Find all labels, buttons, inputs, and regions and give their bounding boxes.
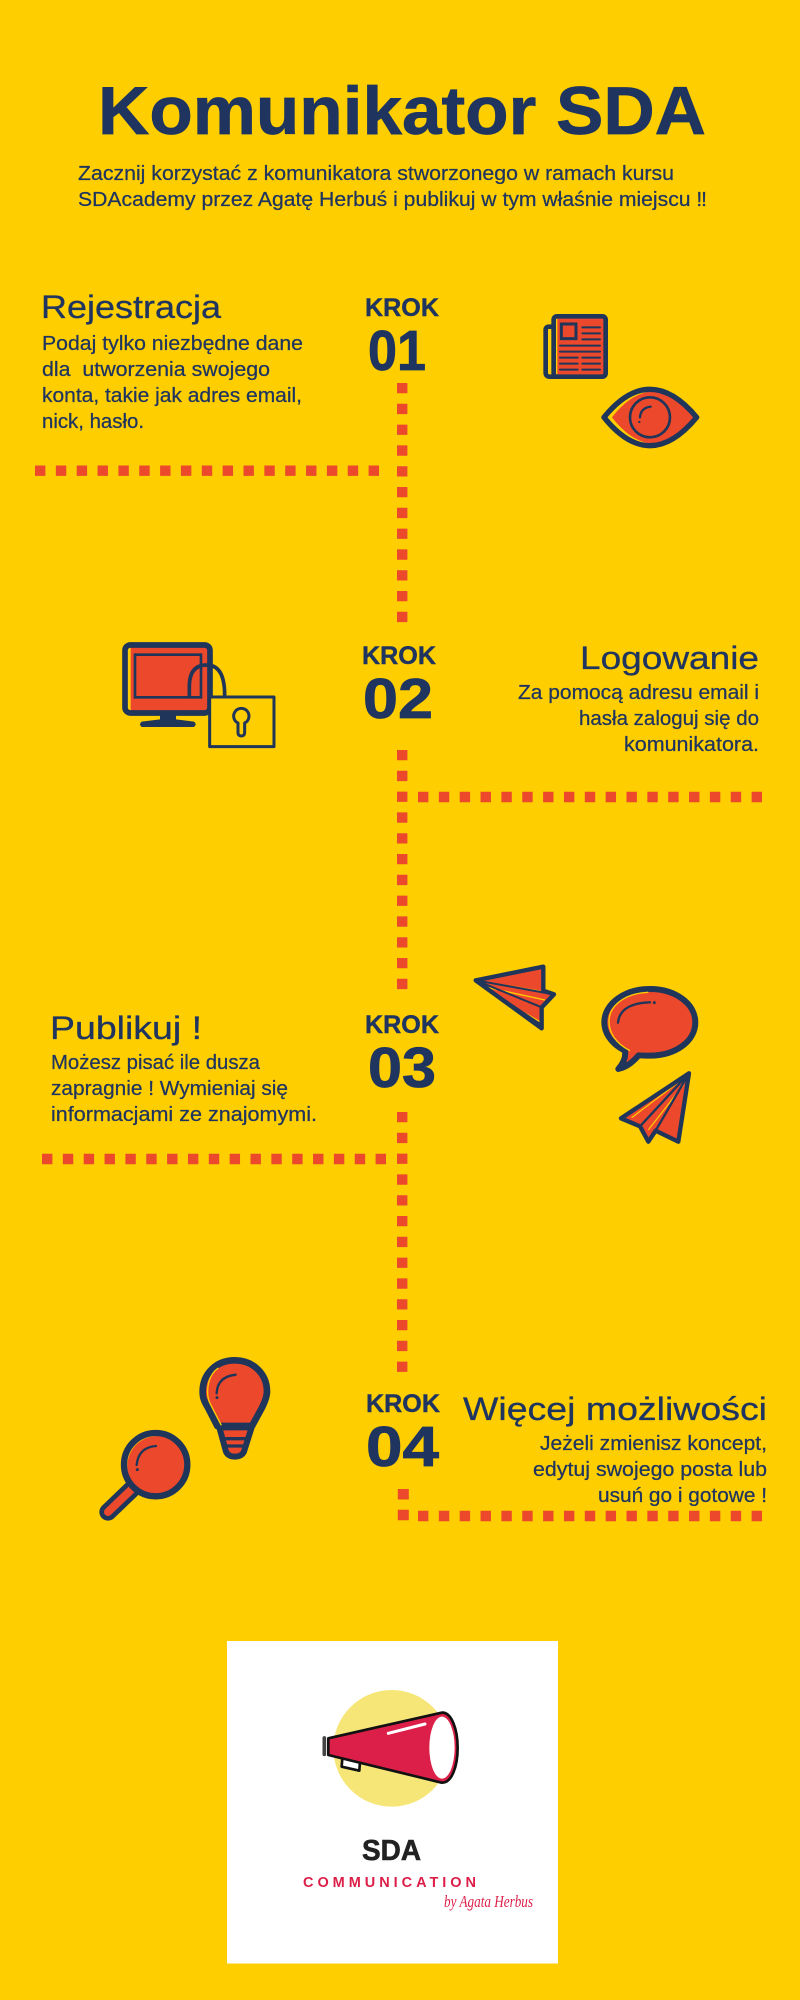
step 1 label [365, 294, 439, 383]
icon: paper plane right [621, 1073, 689, 1142]
logo text: SDA: SDA [362, 1835, 421, 1867]
body: step 1: dla utworzenia swojego [42, 359, 270, 381]
step 2 label [362, 642, 436, 731]
heading: Logowanie: Logowanie [580, 640, 759, 676]
step 1 label: 01 [368, 319, 426, 383]
intro text [78, 163, 707, 211]
heading: Więcej możliwości: Więcej możliwości [463, 1391, 767, 1427]
body: step 2: Za pomocą adresu email i [518, 682, 759, 704]
panel: logo card [227, 1641, 558, 1964]
body: step 3: informacjami ze znajomymi. [51, 1104, 317, 1126]
body: step 4 [533, 1433, 767, 1507]
icon: newspaper [546, 316, 606, 377]
body: step 2: komunikatora. [624, 734, 759, 756]
body: step 2 [518, 682, 759, 756]
icon: magnifying glass [108, 1433, 187, 1512]
body: step 1: nick, hasło. [42, 411, 144, 433]
intro text: SDAcademy przez Agatę Herbuś i publikuj w tym właśnie miejscu ‼ [78, 189, 707, 211]
panel: step 4 text [463, 1391, 767, 1507]
dotted connector: step 4 [403, 1489, 763, 1521]
icon: paper plane left [476, 967, 554, 1028]
intro text: Zacznij korzystać z komunikatora stworzonego w ramach kursu [78, 163, 674, 185]
step 3 label [365, 1011, 439, 1100]
heading: Publikuj: Publikuj ! [50, 1010, 202, 1046]
body: step 2: hasła zaloguj się do [579, 708, 759, 730]
heading: Rejestracja: Rejestracja [41, 289, 221, 325]
dotted connector: step 1 [35, 383, 402, 623]
step 4 label: 04 [366, 1415, 439, 1479]
panel: step 3 text [50, 1010, 317, 1126]
body: step 3: Możesz pisać ile dusza [51, 1052, 261, 1074]
body: step 3: zapragnie ! Wymieniaj się [51, 1078, 288, 1100]
icon: eye [604, 389, 697, 446]
icon: light bulb [203, 1360, 267, 1457]
body: step 1 [42, 333, 303, 433]
body: step 4: usuń go i gotowe ! [598, 1485, 767, 1507]
panel: step 2 text [518, 640, 759, 756]
title: Komunikator SDA [98, 73, 706, 149]
body: step 4: edytuj swojego posta lub [533, 1459, 767, 1481]
panel: step 1 text [41, 289, 303, 433]
step 3 label: 03 [368, 1036, 436, 1100]
icon: speech bubble [604, 989, 695, 1069]
logo text: signature: by Agata Herbus [444, 1892, 533, 1911]
icon: megaphone [324, 1690, 458, 1807]
body: step 3 [51, 1052, 317, 1126]
step 4 label: KROK [366, 1390, 440, 1418]
icon: monitor with padlock [125, 645, 274, 747]
step 1 label: KROK [365, 294, 439, 322]
step 2 label: 02 [363, 667, 433, 731]
dotted connector: step 3 [42, 1112, 402, 1373]
body: step 1: konta, takie jak adres email, [42, 385, 302, 407]
step 3 label: KROK [365, 1011, 439, 1039]
body: step 1: Podaj tylko niezbędne dane [42, 333, 303, 355]
logo text: COMMUNICATION: COMMUNICATION [303, 1875, 476, 1891]
step 2 label: KROK [362, 642, 436, 670]
step 4 label [366, 1390, 440, 1479]
body: step 4: Jeżeli zmienisz koncept, [540, 1433, 767, 1455]
dotted connector: step 2 [402, 750, 763, 990]
